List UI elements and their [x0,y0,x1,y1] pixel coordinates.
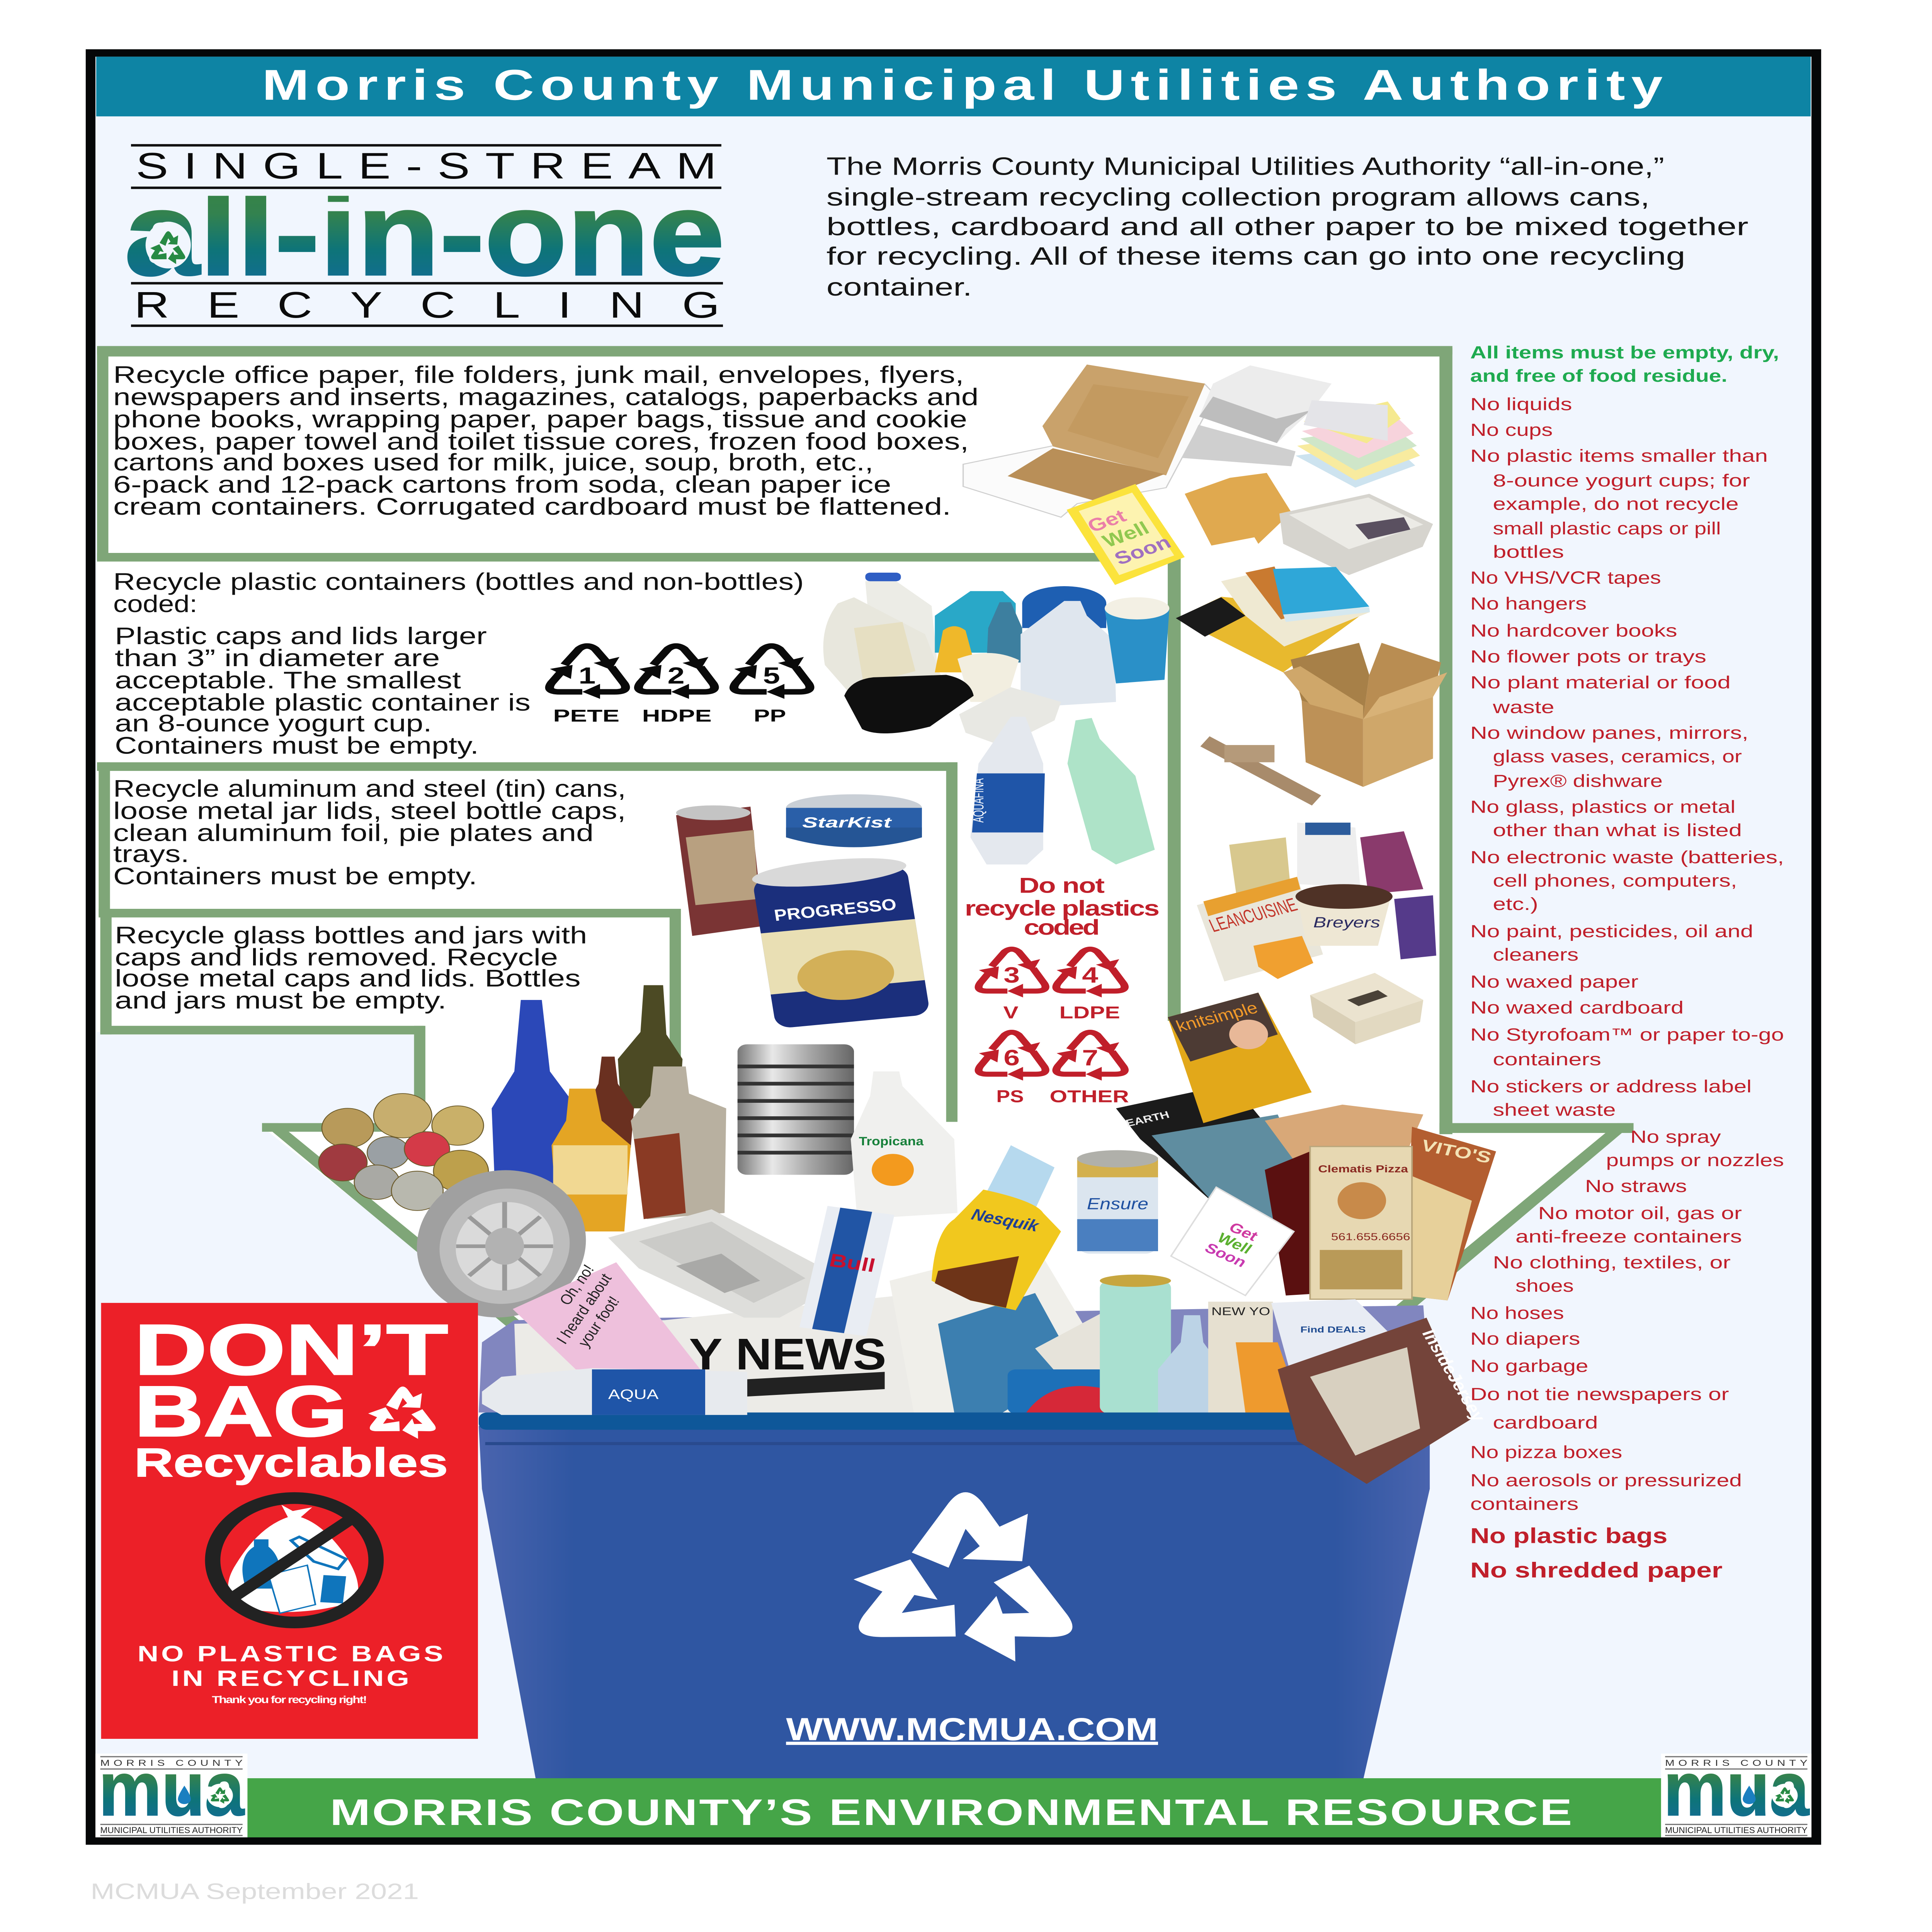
panel text: metal: Containers must be empty. [113,863,477,889]
do not recycle callout: 3 [1003,963,1020,988]
photo: get well note: Soon [1202,1240,1250,1270]
rules list: and free of food residue. [1470,366,1727,386]
panel text: metal: clean aluminum foil, pie plates and [113,820,594,846]
rules list: cleaners [1493,945,1578,964]
do not recycle callout: recycle plastics [965,896,1160,920]
photo: metal cans: PROGRESSO [773,895,898,925]
photo: foil tray [608,1209,847,1318]
photo: energy drink can [799,1206,895,1336]
rules list: No hangers [1470,594,1587,614]
rules list: pumps or nozzles [1606,1151,1784,1170]
rules list: bottles [1493,542,1564,562]
poster: don't bag recyclables: DON’T [134,1310,448,1389]
photo: books [1176,566,1370,672]
rules list: example, do not recycle [1493,494,1739,514]
panel text: plastic: Containers must be empty. [115,732,479,759]
photo: colored paper stack [1296,400,1420,488]
rules list: etc.) [1493,895,1538,914]
photo: Ensure can: Ensure [1087,1195,1148,1213]
poster: don't bag recyclables: Thank you for recycling right! [212,1694,367,1706]
bin contents: NEW YO [1211,1306,1270,1318]
logo: MUA left [95,1746,247,1837]
accepted plastic codes: PP [754,706,786,726]
logo: MUA right [1661,1746,1811,1837]
rules list: No waxed paper [1470,972,1638,992]
rules list: No waxed cardboard [1470,998,1684,1017]
photo: pink note card: Oh, no! [556,1263,598,1307]
bin body [479,1426,1430,1786]
do not recycle callout: PS [996,1087,1024,1106]
intro text: for recycling. All of these items can go into one recycling [827,242,1685,270]
rules list: No shredded paper [1470,1558,1723,1582]
photo: metal cans: StarKist [802,815,892,831]
rules list: waste [1492,697,1554,717]
panel text: plastic: Plastic caps and lids larger [115,622,487,650]
panel text: paper: cream containers. Corrugated cardboard must be flattened. [113,493,951,520]
panel text: metal [113,775,626,889]
logo: MUA right: MUNICIPAL UTILITIES AUTHORITY [1665,1825,1808,1835]
photo: pink note card: I heard about [553,1271,616,1346]
rules list: No clothing, textiles, or [1493,1253,1731,1272]
panel text: paper: Recycle office paper, file folders, junk mail, envelopes, flyers, [113,361,964,388]
photo: toilet paper tubes [1205,742,1316,801]
intro text: The Morris County Municipal Utilities Authority “all-in-one,” [827,152,1664,180]
do not recycle callout: Do not [1019,873,1105,898]
panel text: glass [115,922,587,1014]
photo: knit magazine [1168,993,1312,1123]
photo: newspaper front page [514,1296,946,1413]
rules list: No straws [1585,1177,1687,1196]
photo: food flyers: 561.655.6656 [1331,1231,1410,1242]
rules list: No flower pots or trays [1470,647,1706,667]
rules list: No window panes, mirrors, [1470,723,1748,743]
water bottle on rim: AQUA [608,1387,659,1402]
photo: food cartons: LEANCUISINE [1206,894,1300,936]
rules list: cell phones, computers, [1493,871,1737,891]
panel text: paper [113,361,978,520]
rules list: cardboard [1493,1413,1598,1432]
panel text: plastic: an 8-ounce yogurt cup. [115,710,432,737]
accepted plastic codes: 1 [578,662,596,689]
photo: knit magazine: knitsimple [1173,998,1260,1036]
photo: food flyers [1265,1105,1496,1301]
rules list: No electronic waste (batteries, [1470,848,1784,867]
logo: MUA right: MORRIS COUNTY [1665,1758,1808,1768]
photo: food flyers: Clematis Pizza [1318,1164,1408,1175]
logo: single-stream all-in-one recycling: SINGLE-STREAM [136,145,716,187]
intro text: single-stream recycling collection program allows cans, [827,183,1650,211]
photo: Ensure can [1077,1150,1158,1253]
photo: pink note card [513,1262,700,1369]
accepted plastic codes: PETE [553,706,619,726]
photo: newspapers [1279,494,1433,575]
photo: Nesquik bottle: Nesquik [969,1205,1042,1235]
rules list: glass vases, ceramics, or [1493,747,1742,766]
photo: Earth book: EARTH [1124,1109,1171,1129]
photo: get well card: Get [1083,506,1130,536]
rules list: 8-ounce yogurt cups; for [1493,471,1750,490]
header bar [96,57,1811,116]
accepted plastic codes: 2 [668,662,685,689]
footer bar [243,1778,1666,1837]
photo: pink note card: your foot! [573,1295,624,1350]
panel text: glass: caps and lids removed. Recycle [115,944,558,971]
photo: manila envelopes [1185,473,1291,546]
Inside Jersey magazine [1278,1318,1490,1484]
photo: get well card: Well [1099,518,1153,551]
recycle icon [829,1492,1098,1672]
rules list: All items must be empty, dry, [1470,343,1779,362]
Inside Jersey magazine: InsideJersey [1418,1327,1490,1424]
poster: don't bag recyclables: BAG [134,1371,348,1451]
photo: plastic containers [823,573,1169,864]
panel text: glass: loose metal caps and lids. Bottles [115,965,581,992]
photo: orange juice jug: Tropicana [859,1134,923,1148]
panel text: metal: trays. [113,840,189,867]
accepted plastic codes [549,646,810,726]
intro text [827,152,1748,301]
intro text: bottles, cardboard and all other paper to be mixed together [827,213,1748,241]
bin contents [1008,1275,1423,1414]
poster: don't bag recyclables [101,1303,478,1739]
white interior of green outline [97,350,1626,1342]
panel text: plastic: Recycle plastic containers (bottles and non-bottles) [113,568,804,595]
photo: glass bottles [492,985,726,1231]
photo: orange juice jug [851,1071,957,1219]
rules list: containers [1470,1494,1578,1514]
rules list: No liquids [1470,395,1572,414]
logo: single-stream all-in-one recycling: all-in-one [124,168,724,300]
rules list: No plant material or food [1470,673,1731,692]
recycling bin [479,1275,1490,1786]
rules list: No motor oil, gas or [1538,1204,1742,1223]
rules list: anti-freeze containers [1515,1227,1742,1247]
photo: get well note: Well [1214,1230,1255,1257]
poster: don't bag recyclables: IN RECYCLING [172,1666,409,1691]
rules list [1470,343,1784,1582]
icon: no plastic bags [213,1498,376,1622]
panel text: plastic: acceptable plastic container is [115,689,531,716]
logo: single-stream all-in-one recycling: RECYCLING [134,284,720,326]
do not recycle callout: coded [1024,915,1100,939]
photo: food flyers: VITO'S [1419,1136,1493,1167]
panel text: plastic: coded: [113,590,197,617]
accepted plastic codes: 5 [763,662,780,689]
photo: get well card [1066,484,1185,585]
photo: magazines and papers [889,1244,1132,1413]
green outline arrow [97,346,1634,1342]
photo: get well note [1171,1187,1294,1296]
water bottle on rim [482,1368,747,1415]
photo: newspaper front page: Y NEWS [689,1330,886,1379]
rules list: No pizza boxes [1470,1442,1622,1462]
photo: Earth book [1116,1084,1318,1238]
photo: tissue box [1310,973,1423,1044]
title: Morris County Municipal Utilities Authority [262,61,1663,109]
rules list: Do not tie newspapers or [1470,1384,1729,1404]
rules list: No plastic items smaller than [1470,446,1768,466]
rules list: No hoses [1470,1303,1564,1323]
photo: energy drink can: Bull [827,1250,878,1276]
rules list: No cups [1470,420,1553,440]
photo: paper reams [1183,366,1332,466]
rules list: No glass, plastics or metal [1470,797,1735,817]
logo: MUA left: mua [99,1746,245,1832]
photo: food cartons [1197,823,1436,981]
poster: don't bag recyclables: NO PLASTIC BAGS [138,1641,443,1666]
rules list: other than what is listed [1493,821,1742,840]
do not recycle callout [965,873,1160,1106]
bin rim [479,1413,1431,1430]
rules list: sheet waste [1493,1100,1616,1120]
panel text: plastic [113,568,804,759]
rules list: containers [1493,1050,1601,1069]
panel text: paper: phone books, wrapping paper, paper bags, tissue and cookie [113,406,967,433]
date note: MCMUA September 2021 [90,1879,419,1904]
logo: MUA left: MORRIS COUNTY [100,1758,243,1768]
photo: plastic containers: AQUAFINA [971,778,987,823]
panel text: glass: and jars must be empty. [115,987,446,1014]
photo: food cartons: Breyers [1313,914,1380,930]
do not recycle callout: V [1003,1003,1019,1022]
photo: get well note: Get [1226,1219,1262,1244]
photo: pizza box [963,364,1216,517]
rules list: shoes [1515,1276,1574,1296]
logo: MUA right: mua [1663,1746,1810,1832]
panel text: glass: Recycle glass bottles and jars with [115,922,587,949]
panel text: paper: boxes, paper towel and toilet tissue cores, frozen food boxes, [113,428,969,455]
panel text: plastic: acceptable. The smallest [115,667,461,694]
panel text: paper: 6-pack and 12-pack cartons from soda, clean paper ice [113,471,891,498]
photo: get well card: Soon [1111,532,1175,569]
rules list: small plastic caps or pill [1493,519,1721,538]
logo: MUA left: MUNICIPAL UTILITIES AUTHORITY [100,1825,243,1835]
do not recycle callout: 7 [1082,1045,1098,1070]
rules list: No VHS/VCR tapes [1470,568,1661,588]
logo: single-stream all-in-one recycling [124,144,724,327]
panel text: paper: cartons and boxes used for milk, juice, soup, broth, etc., [113,449,873,476]
panel text: metal: Recycle aluminum and steel (tin) cans, [113,775,626,802]
photo: Nesquik bottle [932,1145,1061,1310]
panel text: paper: newspapers and inserts, magazines, catalogs, paperbacks and [113,384,978,410]
intro text: container. [827,273,972,301]
panel text: plastic: than 3” in diameter are [115,645,440,672]
bin contents: Find DEALS [1300,1325,1366,1335]
rules list: No paint, pesticides, oil and [1470,922,1753,941]
rules list: No hardcover books [1470,621,1677,641]
photo: pie plate [402,1160,601,1328]
do not recycle callout: OTHER [1050,1087,1129,1106]
photo: cardboard box [1283,643,1447,787]
rules list: Pyrex® dishware [1493,771,1663,791]
footer bar: MORRIS COUNTY’S ENVIRONMENTAL RESOURCE [330,1792,1572,1833]
rules list: No aerosols or pressurized [1470,1471,1742,1490]
photo: steel can [738,1044,854,1175]
rules list: No plastic bags [1470,1524,1668,1548]
rules list: No garbage [1470,1356,1588,1376]
rules list: No Styrofoam™ or paper to-go [1470,1025,1784,1044]
do not recycle callout: 6 [1003,1045,1020,1070]
bin back wall [479,1305,1431,1413]
do not recycle callout: 4 [1082,963,1098,988]
photo: metal caps and lids [319,1094,488,1211]
poster: don't bag recyclables: Recyclables [134,1440,448,1485]
rules list: No spray [1630,1127,1721,1147]
panel text: metal: loose metal jar lids, steel bottle caps, [113,798,626,824]
website: WWW.MCMUA.COM [786,1711,1158,1747]
accepted plastic codes: HDPE [642,706,712,726]
rules list: No stickers or address label [1470,1077,1752,1096]
photo: metal cans [676,794,930,1029]
rules list: No diapers [1470,1329,1580,1349]
do not recycle callout: LDPE [1060,1003,1120,1022]
